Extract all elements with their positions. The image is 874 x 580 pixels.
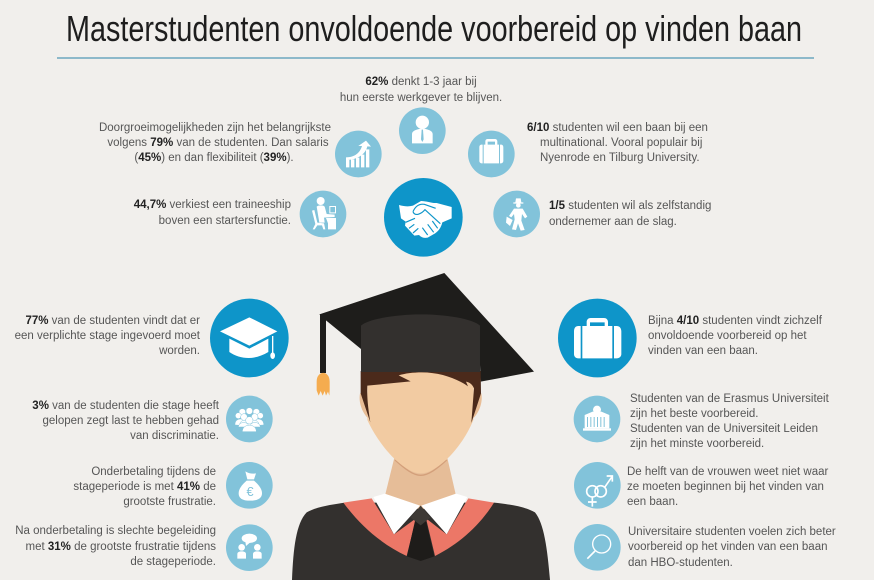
illustration: graduate [292, 273, 550, 580]
text: Erasmus en Leiden: Studenten van de Erasmus Universiteit [630, 393, 830, 405]
text: Erasmus en Leiden: zijn het minste voorbereid. [630, 438, 764, 450]
text: onderbetaling: grootste frustratie. [123, 496, 216, 508]
text: onvoldoende voorbereid: vinden van een baan. [648, 345, 758, 357]
text: zelfstandig ondernemer: ondernemer aan de slag. [549, 216, 677, 228]
tassel [317, 314, 330, 396]
icon: money bag [226, 462, 273, 509]
icon: university building [574, 396, 620, 442]
icon: conversation [226, 524, 273, 571]
text: discriminatie: 3% van de studenten die stage heeft [32, 400, 219, 412]
text: universitaire studenten: Universitaire studenten voelen zich beter [628, 526, 836, 538]
text: discriminatie: gelopen zegt last te hebben gehad [43, 415, 219, 427]
cap [361, 314, 480, 372]
chin shadow [395, 460, 447, 475]
icon: small briefcase [468, 131, 515, 177]
text: zelfstandig ondernemer: 1/5 studenten wil als zelfstandig [549, 200, 711, 212]
text: doorgroeimogelijkheden: (45%) en dan flexibiliteit (39%). [134, 152, 294, 164]
collar [373, 494, 467, 534]
text: onvoldoende voorbereid: onvoldoende voorbereid op het [648, 330, 807, 342]
text: slechte begeleiding: Na onderbetaling is slechte begeleiding [15, 525, 216, 537]
text: universitaire studenten: voorbereid op het vinden van een baan [628, 541, 828, 553]
text: Erasmus en Leiden: zijn het beste voorbereid. [630, 408, 758, 420]
hair [361, 371, 481, 423]
icon: large briefcase [558, 299, 637, 377]
text: helft van de vrouwen: ze moeten beginnen bij het vinden van [627, 481, 824, 493]
neck [385, 455, 456, 510]
text: discriminatie: van discriminatie. [130, 430, 219, 442]
text: traineeship: boven een startersfunctie. [159, 215, 291, 227]
ears [360, 393, 482, 420]
text: multinational: multinational. Vooral populair bij [540, 137, 702, 149]
text: verplichte stage: een verplichte stage ingevoerd moet [15, 330, 201, 342]
text: slechte begeleiding: de stageperiode. [130, 556, 216, 568]
icon: gender symbols [574, 462, 621, 509]
icon: graduation cap [210, 299, 289, 377]
icon: money bag: € [246, 485, 254, 499]
face [367, 371, 474, 473]
icon: growth chart [335, 131, 382, 177]
text: verplichte stage: worden. [158, 345, 200, 357]
text: 62% werkgever: 62% denkt 1-3 jaar bij [365, 76, 477, 88]
gown [292, 503, 550, 580]
text: helft van de vrouwen: een baan. [627, 496, 678, 508]
text: doorgroeimogelijkheden: Doorgroeimogelijkheden zijn het belangrijkste [99, 122, 331, 134]
icon: magnifier [574, 524, 621, 571]
text: onderbetaling: stageperiode is met 41% de [73, 481, 216, 493]
mortarboard [319, 273, 534, 382]
icon: person at desk [300, 191, 346, 237]
text: onderbetaling: Onderbetaling tijdens de [91, 466, 216, 478]
tie [407, 521, 434, 561]
sash [343, 498, 494, 556]
text: multinational: 6/10 studenten wil een baan bij een [527, 122, 708, 134]
text: slechte begeleiding: met 31% de grootste frustratie tijdens [25, 541, 216, 553]
text: helft van de vrouwen: De helft van de vrouwen weet niet waar [627, 466, 829, 478]
text: 62% werkgever: hun eerste werkgever te blijven. [340, 92, 502, 104]
icon: handshake [384, 178, 463, 257]
text: multinational: Nyenrode en Tilburg University. [540, 152, 700, 164]
icon: crowd [226, 396, 273, 442]
icon: walking entrepreneur [493, 191, 540, 237]
text: universitaire studenten: dan HBO-studenten. [628, 557, 733, 569]
text: verplichte stage: 77% van de studenten vindt dat er [25, 315, 200, 327]
text: Erasmus en Leiden: Studenten van de Universiteit Leiden [630, 423, 818, 435]
text: onvoldoende voorbereid: Bijna 4/10 studenten vindt zichzelf [648, 315, 822, 327]
text: doorgroeimogelijkheden: volgens 79% van de studenten. Dan salaris [107, 137, 329, 149]
icon: person with tie [399, 107, 446, 154]
text: traineeship: 44,7% verkiest een traineeship [134, 199, 291, 211]
